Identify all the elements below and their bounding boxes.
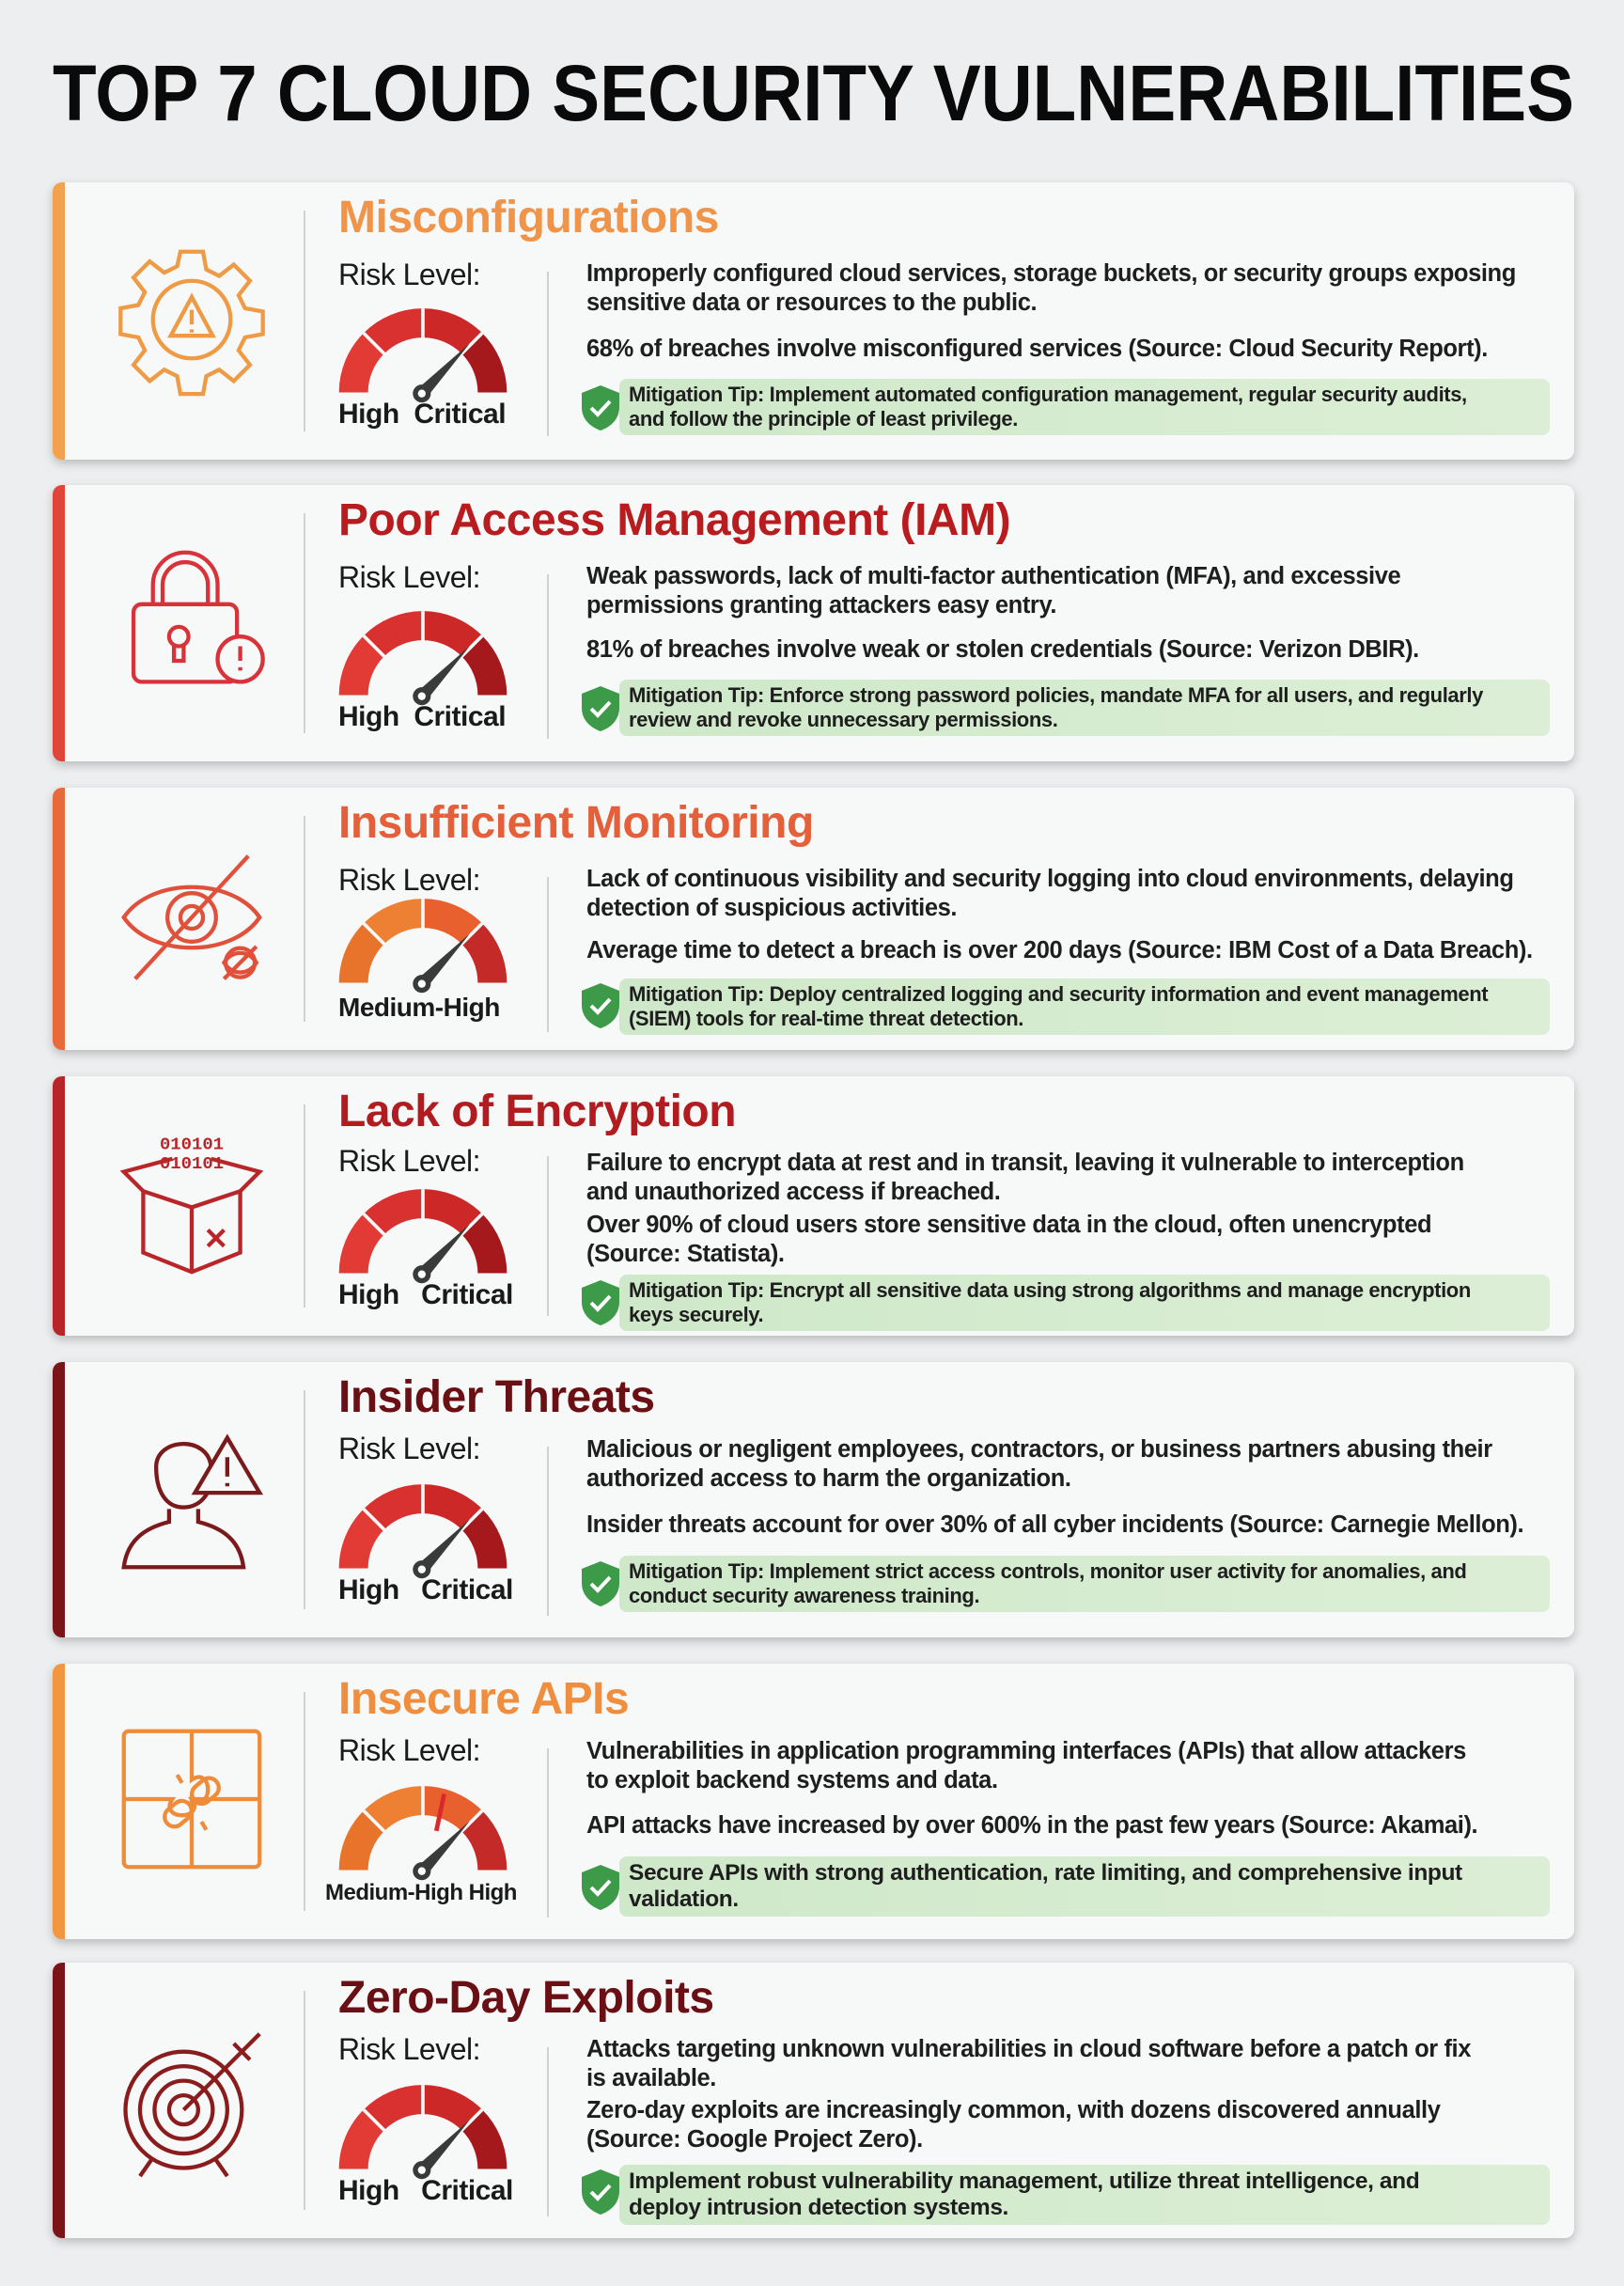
gauge <box>338 899 508 993</box>
description: sensitive data or resources to the public. <box>586 290 1037 316</box>
gauge labels: High Critical <box>338 1574 513 1605</box>
icon: shield <box>582 385 619 431</box>
risk label: Risk Level: <box>338 1733 480 1767</box>
gauge <box>338 1189 508 1284</box>
description <box>586 2036 1472 2091</box>
gauge labels: Medium-High High <box>325 1880 517 1905</box>
mitigation tip: keys securely. <box>629 1303 763 1326</box>
icon: open box with binary: 010101 <box>160 1135 224 1155</box>
description: Vulnerabilities in application programming interfaces (APIs) that allow attackers <box>586 1738 1466 1764</box>
description: Improperly configured cloud services, storage buckets, or security groups exposing <box>586 260 1516 287</box>
statistic: Insider threats account for over 30% of all cyber incidents (Source: Carnegie Mellon). <box>586 1511 1523 1538</box>
statistic: 81% of breaches involve weak or stolen credentials (Source: Verizon DBIR). <box>586 636 1419 663</box>
icon: open box with binary: 010101 <box>160 1153 224 1174</box>
description <box>586 1436 1492 1492</box>
mitigation tip <box>619 379 1550 435</box>
panel: misconfigurations <box>53 182 1574 460</box>
risk label: Risk Level: <box>338 2032 480 2066</box>
mitigation tip: (SIEM) tools for real-time threat detection. <box>629 1007 1023 1030</box>
mitigation tip: deploy intrusion detection systems. <box>629 2195 1008 2220</box>
description <box>586 563 1400 618</box>
description: Weak passwords, lack of multi-factor authentication (MFA), and excessive <box>586 563 1400 589</box>
statistic: (Source: Statista). <box>586 1241 785 1267</box>
description: Failure to encrypt data at rest and in transit, leaving it vulnerable to interception <box>586 1150 1464 1176</box>
icon: person warning <box>121 1434 263 1570</box>
mitigation tip <box>619 2165 1550 2225</box>
gauge <box>338 611 508 705</box>
panel: poor access management <box>53 485 1574 761</box>
description: to exploit backend systems and data. <box>586 1767 998 1793</box>
gauge <box>338 2085 508 2179</box>
statistic: API attacks have increased by over 600% in the past few years (Source: Akamai). <box>586 1812 1477 1839</box>
icon: shield <box>582 1561 619 1606</box>
mitigation tip: Mitigation Tip: Implement automated configuration management, regular security audits, <box>629 383 1467 406</box>
mitigation tip: validation. <box>629 1887 739 1912</box>
mitigation tip <box>619 1275 1550 1331</box>
mitigation tip <box>619 1556 1550 1612</box>
panel: zero-day exploits <box>53 1963 1574 2238</box>
icon: shield <box>582 983 619 1028</box>
mitigation tip <box>619 979 1550 1035</box>
icon: shield <box>582 1280 619 1325</box>
icon: open box with binary <box>120 1135 263 1275</box>
panel: insecure apis <box>53 1664 1574 1939</box>
icon: puzzle broken link <box>122 1730 261 1869</box>
mitigation tip: Mitigation Tip: Enforce strong password policies, mandate MFA for all users, and regularly <box>629 683 1483 707</box>
heading: Insecure APIs <box>338 1674 629 1724</box>
statistic: (Source: Google Project Zero). <box>586 2126 923 2153</box>
mitigation tip: Mitigation Tip: Implement strict access controls, monitor user activity for anomalies, and <box>629 1559 1466 1583</box>
risk label: Risk Level: <box>338 1144 480 1178</box>
mitigation tip: Secure APIs with strong authentication, rate limiting, and comprehensive input <box>629 1860 1462 1886</box>
heading: Insufficient Monitoring <box>338 798 814 848</box>
icon: gear warning <box>118 250 265 397</box>
description: permissions granting attackers easy entry. <box>586 592 1056 618</box>
risk label: Risk Level: <box>338 258 480 291</box>
statistic: Average time to detect a breach is over 200 days (Source: IBM Cost of a Data Breach). <box>586 937 1533 963</box>
description <box>586 260 1516 316</box>
description: is available. <box>586 2065 716 2091</box>
gauge labels: High Critical <box>338 1279 513 1310</box>
heading: Lack of Encryption <box>338 1087 736 1136</box>
mitigation tip: Implement robust vulnerability management, utilize threat intelligence, and <box>629 2169 1419 2194</box>
panel: lack of encryption <box>53 1076 1574 1336</box>
statistic: Zero-day exploits are increasingly common, with dozens discovered annually <box>586 2097 1440 2123</box>
mitigation tip: Mitigation Tip: Deploy centralized logging and security information and event management <box>629 982 1488 1006</box>
gauge <box>338 308 508 402</box>
panel: insufficient monitoring <box>53 788 1574 1050</box>
panel: insider threats <box>53 1362 1574 1637</box>
heading: Poor Access Management (IAM) <box>338 495 1010 545</box>
mitigation tip: Mitigation Tip: Encrypt all sensitive data using strong algorithms and manage encryption <box>629 1278 1471 1302</box>
heading: Insider Threats <box>338 1372 655 1422</box>
description: Attacks targeting unknown vulnerabilities in cloud software before a patch or fix <box>586 2036 1471 2062</box>
mitigation tip <box>619 680 1550 736</box>
mitigation tip: conduct security awareness training. <box>629 1584 979 1607</box>
gauge labels: Medium-High <box>338 993 500 1022</box>
description: and unauthorized access if breached. <box>586 1179 1000 1205</box>
description: Lack of continuous visibility and security logging into cloud environments, delaying <box>586 866 1514 892</box>
gauge labels: High Critical <box>338 701 506 732</box>
heading: Misconfigurations <box>338 193 719 243</box>
gauge <box>338 1484 508 1579</box>
risk label: Risk Level: <box>338 560 480 594</box>
statistic <box>586 2097 1441 2153</box>
mitigation tip: review and revoke unnecessary permissions. <box>629 708 1057 731</box>
icon: lock warning <box>132 551 265 684</box>
description: Malicious or negligent employees, contractors, or business partners abusing their <box>586 1436 1492 1463</box>
statistic: Over 90% of cloud users store sensitive data in the cloud, often unencrypted <box>586 1212 1431 1238</box>
icon: target with dagger <box>123 2032 261 2177</box>
icon: crossed eye <box>121 854 262 980</box>
risk label: Risk Level: <box>338 863 480 897</box>
statistic <box>586 1212 1431 1267</box>
description: authorized access to harm the organization. <box>586 1465 1071 1492</box>
gauge labels: High Critical <box>338 2175 513 2206</box>
description: detection of suspicious activities. <box>586 895 957 921</box>
gauge <box>338 1786 508 1880</box>
statistic: 68% of breaches involve misconfigured services (Source: Cloud Security Report). <box>586 336 1488 362</box>
heading: Zero-Day Exploits <box>338 1973 714 2023</box>
description <box>586 1738 1466 1793</box>
description <box>586 866 1514 921</box>
icon: shield <box>582 686 619 731</box>
description <box>586 1150 1464 1205</box>
risk label: Risk Level: <box>338 1432 480 1465</box>
icon: shield <box>582 1865 619 1910</box>
mitigation tip: and follow the principle of least privilege. <box>629 407 1018 431</box>
mitigation tip <box>619 1856 1550 1917</box>
gauge labels: High Critical <box>338 399 506 430</box>
icon: shield <box>582 2169 619 2215</box>
